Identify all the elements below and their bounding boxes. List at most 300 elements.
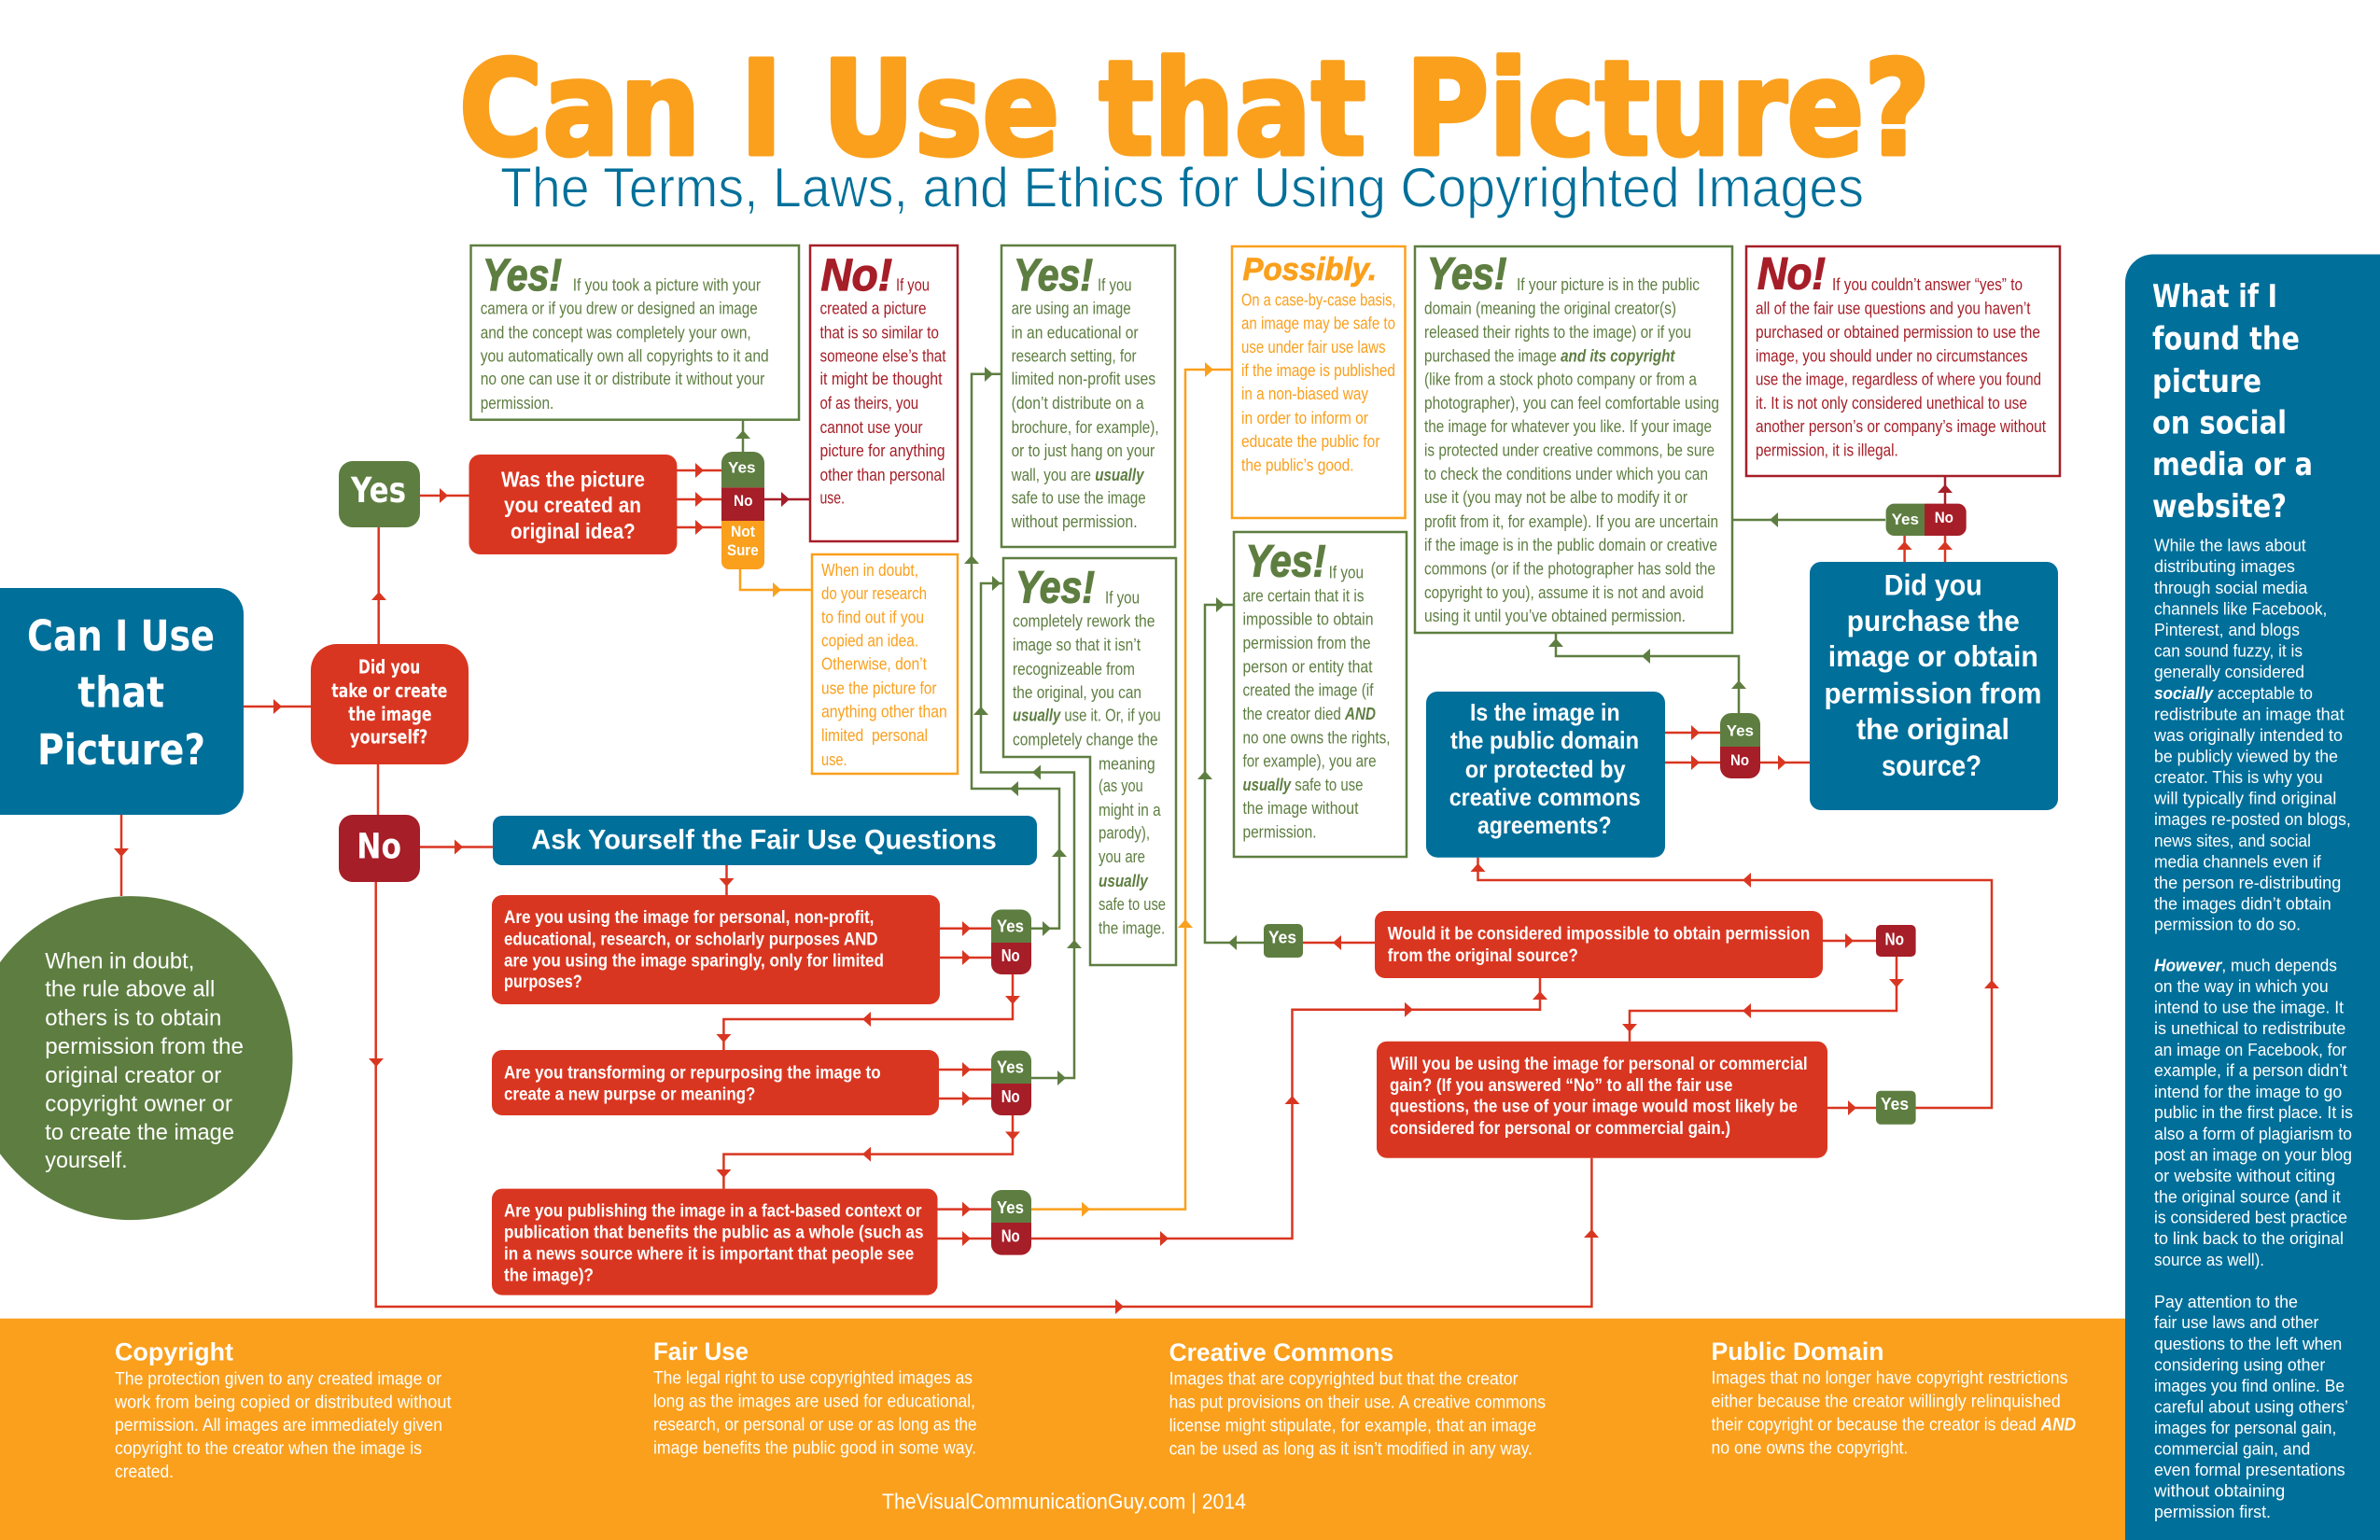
sidebar body text: questions to the left when (2154, 1334, 2342, 1353)
question: fair use three: publication that benefits the public as a whole (such as (504, 1223, 924, 1243)
panel: yes, impossible to obtain permission: If you (1329, 563, 1364, 581)
question: did you purchase: the original (1856, 712, 2009, 746)
panel: possibly (1232, 246, 1406, 518)
question: did you take or create: the image (348, 703, 432, 725)
footer: creative commons definition: Creative Commons (1169, 1338, 1393, 1366)
sidebar body text: the images didn’t obtain (2154, 894, 2331, 914)
panel: yes, rework the image: If you (1105, 588, 1140, 607)
sidebar body text: through social media (2154, 578, 2308, 597)
panel: yes, educational use: Yes! (1014, 251, 1093, 301)
sidebar body text: without obtaining (2153, 1481, 2285, 1501)
arrow: commercial question to yes (1827, 1100, 1876, 1115)
footer: fair use definition: image benefits the public good in some way. (653, 1439, 976, 1459)
panel: start box (0, 588, 244, 815)
panel: yes, rework the image: completely rework the (1013, 612, 1155, 631)
big yes answer (339, 461, 420, 527)
panel: yes, rework the image: (as you (1099, 777, 1143, 795)
arrow: start to circle (114, 815, 129, 896)
arrow: big yes to original idea question (420, 488, 469, 503)
sidebar body text: also a form of plagiarism to (2154, 1124, 2352, 1143)
sidebar body text: generally considered (2154, 662, 2304, 681)
panel: yes, rework the image: parody), (1099, 824, 1150, 843)
panel: yes, you took the picture: If you took a picture with your (573, 276, 761, 295)
sidebar body text: intend for the image to go (2154, 1082, 2342, 1101)
panel: when in doubt: copied an idea. (821, 632, 918, 651)
question: did you purchase: Did you (1884, 568, 1982, 602)
sidebar body text: be publicly viewed by the (2154, 747, 2338, 765)
panel: yes, public domain (1415, 246, 1732, 633)
sidebar body text: even formal presentations (2154, 1460, 2345, 1479)
sidebar body text: However, much depends (2154, 956, 2337, 975)
panel: yes, educational use: brochure, for example), (1012, 418, 1159, 437)
arrow: big no to fair use banner (420, 840, 493, 855)
sidebar body text: the original source (and it (2154, 1186, 2341, 1206)
question: impossible to obtain: Would it be considered impossible to obtain permission (1388, 924, 1810, 945)
panel: possibly: in order to inform or (1241, 409, 1368, 427)
panel: yes, educational use: without permission. (1011, 512, 1138, 531)
question: did you take or create (311, 644, 469, 764)
question: did you purchase: permission from (1824, 676, 2042, 709)
panel: yes, public domain: released their rights to the image) or if you (1424, 323, 1691, 342)
sidebar body text: an image on Facebook, for (2154, 1040, 2346, 1059)
panel: advice circle: yourself. (45, 1148, 128, 1173)
panel: yes, impossible to obtain permission: the image without (1243, 799, 1359, 818)
question: commercial gain: considered for personal or commercial gain.) (1390, 1118, 1730, 1139)
panel: yes, public domain: using it until you’ve obtained permission. (1424, 607, 1686, 625)
panel: yes, impossible to obtain permission: impossible to obtain (1243, 610, 1374, 629)
panel: possibly: an image may be safe to (1241, 315, 1395, 333)
sidebar body text (2153, 535, 2353, 1521)
footer: public domain definition: their copyright or because the creator is dead AND (1712, 1415, 2076, 1435)
panel: yes, public domain: is protected under creative commons, be sure (1424, 441, 1715, 459)
arrow: commercial yes to public domain question (1471, 858, 1999, 1108)
panel: advice circle: permission from the (45, 1034, 244, 1059)
question: public domain: creative commons (1449, 783, 1641, 811)
sidebar body text: will typically find original (2153, 789, 2336, 808)
panel: when in doubt: use. (821, 750, 847, 769)
panel: no, too similar: of as theirs, you (819, 394, 918, 413)
question: did you take or create: take or create (331, 679, 447, 702)
panel: yes, rework the image: the image. (1099, 919, 1165, 938)
footer: fair use definition: research, or personal or use or as long as the (653, 1416, 977, 1435)
panel: advice circle: When in doubt, (45, 949, 194, 974)
answer pill: fair use one: No (1001, 946, 1020, 965)
answer pill: public domain yes no: Yes (1727, 722, 1754, 740)
arrows: purchase question to answers (1897, 536, 1953, 562)
panel: yes, educational use: wall, you are usually (1011, 466, 1144, 484)
answer: commercial yes: Yes (1881, 1095, 1909, 1113)
question: did you take or create: yourself? (350, 726, 427, 749)
question: fair use one: educational, research, or scholarly purposes AND (504, 929, 877, 949)
question: fair use one: are you using the image sparingly, only for limited (504, 950, 884, 971)
panel: yes, public domain: if the image is in the public domain or creative (1424, 536, 1717, 554)
panel: yes, rework the image: Yes! (1015, 564, 1095, 613)
question: public domain: Is the image in (1470, 698, 1620, 726)
panel: possibly: in a non-biased way (1241, 385, 1368, 403)
arrow: start to first question (244, 699, 311, 714)
question: commercial gain: Will you be using the image for personal or commercial (1390, 1054, 1808, 1074)
panel: no, too similar: use. (819, 489, 845, 508)
panel: no, failed fair use: another person’s or company’s image without (1756, 417, 2046, 436)
footer: fair use definition: The legal right to use copyrighted images as (653, 1369, 973, 1389)
sidebar body text: permission to do so. (2154, 915, 2301, 933)
panel: advice circle: to create the image (45, 1120, 234, 1145)
sidebar body text: was originally intended to (2153, 725, 2343, 745)
question: fair use three (492, 1189, 937, 1295)
question: fair use two (492, 1050, 939, 1115)
panel: no, too similar: No! (821, 251, 892, 301)
answer pill: purchase yes no: No (1935, 509, 1953, 526)
panel: no, too similar: it might be thought (819, 370, 943, 388)
footer: creative commons definition: has put provisions on their use. A creative commons (1169, 1393, 1546, 1412)
sidebar body text: can sound fuzzy, it is (2154, 641, 2303, 661)
sidebar body text: is unethical to redistribute (2154, 1018, 2345, 1038)
arrows: fair use question three to answers (937, 1202, 991, 1246)
arrow: impossible question to yes (1303, 935, 1375, 950)
arrows: original idea question to answers (677, 463, 721, 535)
footer: credit line: TheVisualCommunicationGuy.com | 2014 (882, 1490, 1246, 1514)
panel: possibly: use under fair use laws (1241, 338, 1385, 357)
footer: copyright definition: created. (115, 1463, 174, 1482)
sidebar heading: website? (2152, 488, 2287, 525)
sidebar heading: What if I (2152, 278, 2277, 315)
panel: yes, rework the image: completely change the (1013, 731, 1158, 749)
panel: sidebar, social media question (2125, 254, 2380, 1540)
panel: yes, public domain: profit from it, for example). If you are uncertain (1424, 512, 1718, 531)
footer: public domain definition (1712, 1337, 2076, 1458)
banner: fair use questions: Ask Yourself the Fair Use Questions (531, 825, 997, 855)
footer: creative commons definition (1169, 1338, 1546, 1459)
panel: no, too similar: that is so similar to (819, 323, 939, 342)
panel: yes, impossible to obtain permission: for example), you are (1243, 752, 1376, 771)
question: original idea: Was the picture (501, 467, 645, 491)
panel: yes, rework the image: usually use it. Or, if you (1013, 707, 1161, 725)
answer pill: fair use two: Yes (997, 1058, 1024, 1077)
sidebar body text: creator. This is why you (2154, 767, 2323, 787)
sidebar body text: or website without citing (2154, 1166, 2335, 1185)
sidebar body text: channels like Facebook, (2154, 599, 2327, 619)
footer: fair use definition: Fair Use (653, 1337, 749, 1365)
arrow: impossible no to commercial question (1622, 957, 1904, 1042)
sidebar body text: permission first. (2154, 1502, 2271, 1521)
question: did you take or create: Did you (358, 656, 420, 679)
panel: when in doubt: to find out if you (821, 609, 924, 627)
panel: when in doubt (812, 554, 958, 774)
answer pill: fair use two: No (1001, 1087, 1020, 1106)
panel: no, too similar: other than personal (819, 466, 945, 484)
panel: yes, impossible to obtain permission: are certain that it is (1243, 587, 1365, 606)
answer pill: fair use three: Yes (997, 1198, 1024, 1217)
answer: impossible no (1876, 925, 1916, 957)
answer pill: purchase yes no (1886, 504, 1967, 536)
panel: yes, you took the picture: you automatically own all copyrights to it and (481, 346, 769, 365)
title: Can I Use that Picture? (459, 34, 1930, 186)
arrow: fair use question three yes (1031, 362, 1232, 1217)
panel: yes, impossible to obtain permission: Yes! (1245, 537, 1326, 586)
sidebar body text: Pay attention to the (2154, 1292, 2298, 1311)
sidebar body text: media channels even if (2154, 852, 2322, 872)
sidebar heading: on social (2152, 405, 2287, 442)
question: public domain: the public domain (1450, 726, 1639, 754)
question: original idea: you created an (504, 493, 641, 517)
panel: yes, impossible to obtain permission (1234, 532, 1407, 857)
panel: advice circle (0, 896, 293, 1220)
footer: creative commons definition: can be used as long as it isn’t modified in any way. (1169, 1439, 1533, 1459)
panel: yes, public domain: If your picture is in the public (1517, 275, 1700, 294)
question: did you purchase: source? (1882, 749, 1981, 782)
answer: impossible no: No (1885, 931, 1904, 949)
question: did you purchase: purchase the (1847, 604, 2020, 637)
arrow: fair use question one yes (964, 367, 1067, 936)
arrow: fair use question two yes (973, 576, 1082, 1085)
answer pill: yes no not sure: Sure (727, 541, 759, 559)
arrow: first question to big no (377, 764, 379, 815)
panel: no, failed fair use: image, you should under no circumstances (1756, 346, 2027, 365)
arrow: purchase no to no box (1938, 476, 1953, 504)
panel: yes, impossible to obtain permission: usually safe to use (1243, 776, 1363, 794)
panel: start box: that (77, 668, 164, 718)
panel: start box: Picture? (37, 725, 205, 775)
question: impossible to obtain (1375, 911, 1823, 978)
footer: copyright definition: The protection given to any created image or (115, 1369, 442, 1389)
panel: yes, impossible to obtain permission: created the image (if (1243, 681, 1374, 700)
panel: yes, public domain: to check the conditions under which you can (1424, 465, 1708, 483)
panel: advice circle: the rule above all (45, 976, 215, 1002)
answer pill: yes no not sure: No (734, 492, 752, 510)
panel: yes, impossible to obtain permission: person or entity that (1243, 657, 1372, 676)
panel: yes, rework the image: you are (1099, 847, 1145, 866)
big no answer: No (357, 827, 401, 866)
panel: yes, you took the picture: Yes! (483, 251, 562, 301)
footer: fair use definition: long as the images are used for educational, (653, 1393, 975, 1412)
question: fair use three: in a news source where it is important that people see (504, 1243, 914, 1264)
sidebar body text: source as well). (2154, 1250, 2264, 1269)
panel: yes, rework the image: usually (1099, 872, 1149, 890)
answer pill: fair use one (991, 909, 1031, 974)
panel: advice circle: original creator or (45, 1063, 221, 1088)
panel: no, too similar: If you (896, 276, 930, 295)
panel: yes, educational use: If you (1098, 276, 1132, 295)
question: fair use three: Are you publishing the image in a fact-based context or (504, 1201, 922, 1222)
sidebar body text: example, if a person didn’t (2154, 1060, 2347, 1080)
panel: yes, impossible to obtain permission: the creator died AND (1243, 705, 1376, 723)
question: fair use one: Are you using the image for personal, non-profit, (504, 907, 874, 928)
question: fair use one (492, 895, 940, 1004)
question: commercial gain: questions, the use of your image would most likely be (1390, 1097, 1798, 1117)
answer pill: yes no not sure: Yes (728, 459, 756, 477)
question: public domain: or protected by (1465, 755, 1626, 783)
panel: yes, rework the image: might in a (1099, 801, 1162, 819)
panel: yes, public domain: Yes! (1427, 249, 1507, 299)
panel: yes, you took the picture: camera or if you drew or designed an image (481, 299, 758, 317)
answer pill: purchase yes no: Yes (1892, 511, 1919, 528)
panel: when in doubt: use the picture for (821, 679, 937, 698)
panel: yes, you took the picture: no one can use it or distribute it without your (481, 370, 764, 388)
sidebar body text: images you find online. Be (2154, 1376, 2345, 1395)
sidebar body text: intend to use the image. It (2154, 998, 2344, 1017)
arrow: impossible question to no (1823, 933, 1876, 948)
panel: possibly: Possibly. (1243, 252, 1377, 287)
panel: when in doubt: limited personal (821, 726, 928, 745)
arrow: purchase yes to yes box (1732, 512, 1885, 527)
footer: public domain definition: no one owns the copyright. (1712, 1438, 1908, 1458)
panel: no, too similar: picture for anything (819, 441, 945, 460)
panel: no, too similar: someone else’s that (819, 346, 946, 365)
panel: yes, you took the picture: and the concept was completely your own, (481, 323, 751, 342)
panel: yes, public domain: copyright to you), assume it is not and avoid (1424, 583, 1703, 602)
question: fair use one: purposes? (504, 972, 582, 992)
footer: copyright definition: Copyright (115, 1338, 233, 1366)
answer: impossible yes (1264, 924, 1303, 958)
panel: possibly: if the image is published (1241, 361, 1395, 380)
question: fair use two: Are you transforming or repurposing the image to (504, 1063, 881, 1084)
panel: when in doubt: Otherwise, don’t (821, 655, 927, 674)
question: fair use three: the image)? (504, 1265, 594, 1285)
panel: yes, rework the image: image so that it isn’t (1013, 636, 1141, 654)
sidebar body text: public in the first place. It is (2154, 1102, 2353, 1122)
sidebar body text: is considered best practice (2154, 1208, 2347, 1227)
question: commercial gain: gain? (If you answered “No” to all the fair use (1390, 1075, 1733, 1096)
panel: yes, public domain: photographer), you can feel comfortable using (1424, 394, 1719, 413)
arrow: banner to first fair use question (719, 865, 734, 895)
arrow: no to no box (764, 492, 810, 507)
sidebar body text: news sites, and social (2154, 831, 2311, 850)
sidebar body text: redistribute an image that (2154, 704, 2345, 724)
footer: copyright definition: copyright to the creator when the image is (115, 1439, 422, 1459)
answer pill: fair use two (991, 1051, 1031, 1115)
panel: no, too similar: cannot use your (819, 418, 922, 437)
question: original idea: original idea? (511, 519, 636, 543)
footer band (0, 1319, 2125, 1540)
panel: no, too similar: created a picture (819, 299, 926, 317)
arrow: impossible yes to yes box (1197, 597, 1264, 950)
panel: yes, educational use: (don’t distribute on a (1012, 394, 1144, 413)
answer pill: fair use three: No (1001, 1226, 1020, 1245)
sidebar heading (2152, 278, 2313, 525)
panel: yes, you took the picture (470, 245, 799, 420)
panel: no, failed fair use: No! (1757, 249, 1826, 299)
sidebar body text: images for personal gain, (2154, 1418, 2336, 1437)
sidebar body text: careful about using others’ (2154, 1396, 2348, 1416)
arrow: yes to yes box (735, 420, 750, 452)
arrows: fair use question one to answers (940, 921, 991, 965)
answer pill: yes no not sure (721, 452, 764, 569)
panel: no, failed fair use (1746, 246, 2060, 476)
footer: public domain definition: Public Domain (1712, 1337, 1883, 1365)
question: public domain (1426, 692, 1665, 858)
answer pill: public domain yes no: No (1730, 751, 1749, 769)
footer: creative commons definition: license might stipulate, for example, that an image (1169, 1416, 1536, 1435)
sidebar heading: picture (2152, 363, 2261, 400)
panel: yes, educational use: research setting, for (1012, 346, 1137, 365)
answer pill: fair use three (991, 1190, 1031, 1255)
panel: yes, public domain: purchased the image and its copyright (1424, 346, 1675, 365)
panel: yes, rework the image (1003, 558, 1176, 965)
question: impossible to obtain: from the original source? (1388, 945, 1578, 966)
panel: no, failed fair use: all of the fair use questions and you haven’t (1756, 299, 2031, 317)
sidebar body text: socially acceptable to (2154, 683, 2313, 703)
footer: public domain definition: either because the creator willingly relinquished (1712, 1392, 2061, 1411)
sidebar heading: media or a (2152, 446, 2313, 483)
footer: copyright definition (114, 1338, 452, 1482)
panel: when in doubt: do your research (821, 584, 927, 603)
question: public domain: agreements? (1477, 811, 1612, 839)
panel: yes, public domain: domain (meaning the original creator(s) (1424, 299, 1676, 317)
answer pill: yes no not sure: Not (731, 523, 755, 540)
question: commercial gain (1377, 1042, 1827, 1158)
panel: yes, rework the image: safe to use (1099, 895, 1166, 914)
question: did you purchase: image or obtain (1828, 639, 2038, 673)
panel: when in doubt: When in doubt, (821, 561, 918, 580)
panel: yes, educational use: safe to use the image (1012, 489, 1146, 508)
question: did you purchase (1810, 562, 2058, 810)
sidebar body text: commercial gain, and (2154, 1439, 2310, 1458)
panel: possibly: educate the public for (1241, 432, 1379, 451)
footer: copyright definition: permission. All images are immediately given (115, 1416, 442, 1435)
arrow: public domain yes to yes box (1548, 633, 1746, 713)
panel: start box: Can I Use (27, 611, 215, 661)
arrow: question two no to question three (716, 1115, 1020, 1189)
answer: commercial yes (1876, 1091, 1916, 1125)
answer pill: fair use one: Yes (997, 917, 1024, 936)
panel: yes, educational use: in an educational or (1012, 323, 1139, 342)
sidebar body text: While the laws about (2154, 535, 2306, 554)
sidebar body text: on the way in which you (2154, 976, 2329, 996)
arrow: first question to big yes (371, 527, 386, 644)
panel: no, failed fair use: use the image, regardless of where you found (1756, 371, 2041, 389)
panel: no, failed fair use: purchased or obtained permission to use the (1756, 323, 2040, 342)
big yes answer: Yes (350, 470, 406, 511)
panel: advice circle: others is to obtain (45, 1006, 221, 1031)
panel: yes, public domain: commons (or if the photographer has sold the (1424, 560, 1715, 579)
arrow: fair use question three no (1031, 978, 1547, 1246)
panel: no, too similar (810, 245, 958, 541)
panel: yes, rework the image: the original, you can (1013, 683, 1141, 702)
panel: no, failed fair use: it. It is not only considered unethical to use (1756, 394, 2027, 413)
panel: yes, educational use: are using an image (1012, 299, 1131, 317)
panel: advice circle: copyright owner or (45, 1091, 232, 1116)
arrow: question one no to question two (716, 974, 1020, 1050)
arrows: fair use question two to answers (939, 1062, 991, 1106)
panel: yes, educational use: limited non-profit uses (1012, 370, 1155, 388)
arrows: public domain question to answers (1665, 725, 1720, 770)
arrow: big no to commercial gain question (369, 882, 1599, 1314)
panel: yes, educational use: or to just hang on your (1012, 441, 1155, 460)
subtitle: The Terms, Laws, and Ethics for Using Copyrighted Images (500, 157, 1864, 219)
answer pill: public domain yes no (1720, 713, 1760, 778)
footer: public domain definition: Images that no longer have copyright restrictions (1712, 1368, 2068, 1388)
footer: copyright definition: work from being copied or distributed without (114, 1393, 452, 1412)
panel: yes, you took the picture: permission. (481, 394, 553, 413)
panel: possibly: On a case-by-case basis, (1241, 291, 1396, 310)
answer: impossible yes: Yes (1268, 928, 1296, 946)
sidebar body text: Pinterest, and blogs (2154, 620, 2300, 639)
panel: yes, public domain: (like from a stock photo company or from a (1424, 371, 1698, 389)
panel: yes, impossible to obtain permission: no one owns the rights, (1243, 728, 1391, 747)
sidebar body text: distributing images (2154, 556, 2295, 576)
sidebar body text: post an image on your blog (2154, 1144, 2352, 1164)
panel: yes, impossible to obtain permission: permission from the (1243, 634, 1370, 652)
panel: no, failed fair use: permission, it is illegal. (1756, 441, 1898, 459)
banner: fair use questions (493, 816, 1037, 865)
panel: when in doubt: anything other than (821, 702, 947, 721)
question: fair use two: create a new purpse or meaning? (504, 1085, 755, 1105)
big no answer (339, 815, 420, 882)
panel: yes, rework the image: recognizeable from (1013, 660, 1135, 679)
panel: no, failed fair use: If you couldn’t answer “yes” to (1832, 275, 2023, 294)
panel: yes, educational use (1001, 245, 1175, 547)
sidebar body text: considering using other (2154, 1354, 2325, 1374)
